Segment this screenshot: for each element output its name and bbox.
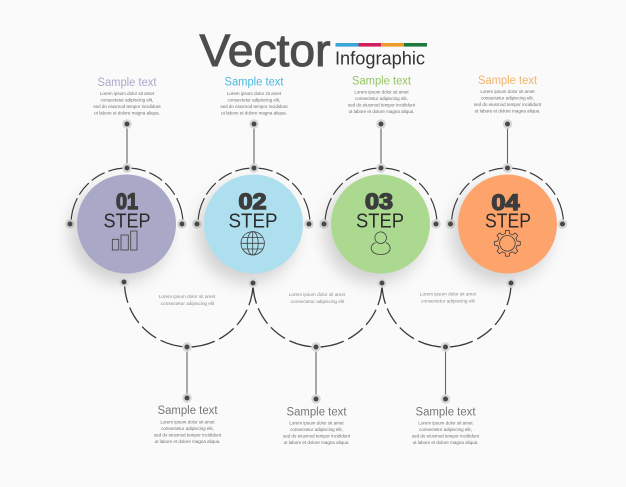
bottom text 2: Lorem ipsum dolor sit amet (289, 421, 344, 426)
middle text 3 (420, 292, 477, 304)
top text 1: Sample text (98, 77, 157, 89)
step 3: 03 (365, 189, 393, 214)
bottom text 1: Sample text (158, 405, 218, 417)
connector arc 3 (382, 283, 511, 404)
top text 2 (220, 77, 288, 115)
step 2 (192, 119, 314, 283)
middle text 1: consectetur adipiscing elit (161, 301, 215, 306)
icon: bar chart (112, 231, 137, 250)
bottom text 2 (283, 407, 351, 445)
step 1 (65, 119, 187, 283)
bottom text 2: Sample text (286, 407, 347, 419)
top text 2: consectetur adipiscing elit, (228, 97, 280, 102)
icon: person (371, 232, 390, 254)
bottom text 1 (154, 405, 222, 444)
top text 3: consectetur adipiscing elit, (355, 96, 408, 101)
title: Vector (200, 25, 331, 76)
bottom text 1: consectetur adipiscing elit, (161, 426, 214, 431)
step 2: 02 (238, 189, 266, 214)
step 1: STEP (104, 210, 150, 232)
bottom text 1: Lorem ipsum dolor sit amet (160, 420, 215, 424)
bottom text 2: consectetur adipiscing elit, (290, 427, 343, 432)
bottom text 1: ut labore et dolore magna aliqua. (155, 439, 220, 444)
top text 2: sed do eiusmod tempor incididunt (220, 104, 288, 109)
top text 1: Lorem ipsum dolor sit amet (100, 91, 155, 96)
top text 4: sed do eiusmod tempor incididunt (474, 102, 542, 107)
step 4 (446, 119, 567, 283)
bottom text 3: sed do eiusmod tempor incididunt (412, 434, 480, 439)
bottom text 3: consectetur adipiscing elit, (419, 427, 472, 432)
connector arc 1 (124, 282, 253, 403)
bottom text 2: ut labore et dolore magna aliqua. (284, 440, 349, 445)
title (200, 25, 425, 76)
top text 4: ut labore et dolore magna aliqua. (475, 108, 540, 113)
top text 3: ut labore et dolore magna aliqua. (349, 109, 414, 114)
bottom text 3: Lorem ipsum dolor sit amet (418, 421, 473, 426)
bottom text 3: ut labore et dolore magna aliqua. (413, 440, 478, 445)
step 3 (319, 119, 441, 283)
connector arc 2 (253, 283, 382, 404)
middle text 2 (289, 292, 346, 304)
top text 3: Lorem ipsum dolor sit amet (354, 89, 409, 94)
top text 1 (93, 77, 161, 116)
step 1: 01 (116, 189, 138, 214)
bottom text 3 (412, 407, 480, 445)
bottom text 2: sed do eiusmod tempor incididunt (283, 434, 351, 439)
middle text 2: consectetur adipiscing elit (291, 299, 345, 304)
colour bar (336, 43, 427, 47)
connector dots (119, 277, 516, 288)
top text 4 (474, 75, 542, 113)
top text 4: consectetur adipiscing elit, (481, 95, 534, 100)
step 4: 04 (492, 190, 520, 215)
title: Infographic (335, 48, 425, 68)
bottom text 1: sed do eiusmod tempor incididunt (154, 432, 222, 438)
top text 4: Lorem ipsum dolor sit amet (480, 89, 535, 94)
top text 4: Sample text (478, 75, 538, 87)
step 4: STEP (485, 210, 531, 232)
middle text 1 (159, 294, 216, 306)
top text 1: consectetur adipiscing elit, (101, 98, 153, 103)
top text 2: ut labore et dolore magna aliqua. (221, 110, 287, 115)
top text 1: ut labore et dolore magna aliqua. (94, 111, 160, 116)
step 2: STEP (228, 210, 278, 232)
icon: gear (495, 230, 520, 256)
middle text 3: consectetur adipiscing elit (421, 299, 476, 304)
top text 3: sed do eiusmod tempor incididunt (348, 102, 416, 107)
bottom text 3: Sample text (416, 407, 476, 419)
middle text 3: Lorem ipsum dolor sit amet (420, 292, 477, 297)
icon: globe (241, 232, 264, 255)
middle text 1: Lorem ipsum dolor sit amet (159, 294, 216, 299)
top text 2: Lorem ipsum dolor sit amet (227, 91, 282, 96)
middle text 2: Lorem ipsum dolor sit amet (289, 292, 346, 297)
top text 3 (348, 76, 416, 114)
top text 1: sed do eiusmod tempor incididunt (93, 104, 161, 109)
step 3: STEP (356, 210, 404, 232)
top text 3: Sample text (352, 76, 412, 88)
top text 2: Sample text (224, 77, 284, 89)
